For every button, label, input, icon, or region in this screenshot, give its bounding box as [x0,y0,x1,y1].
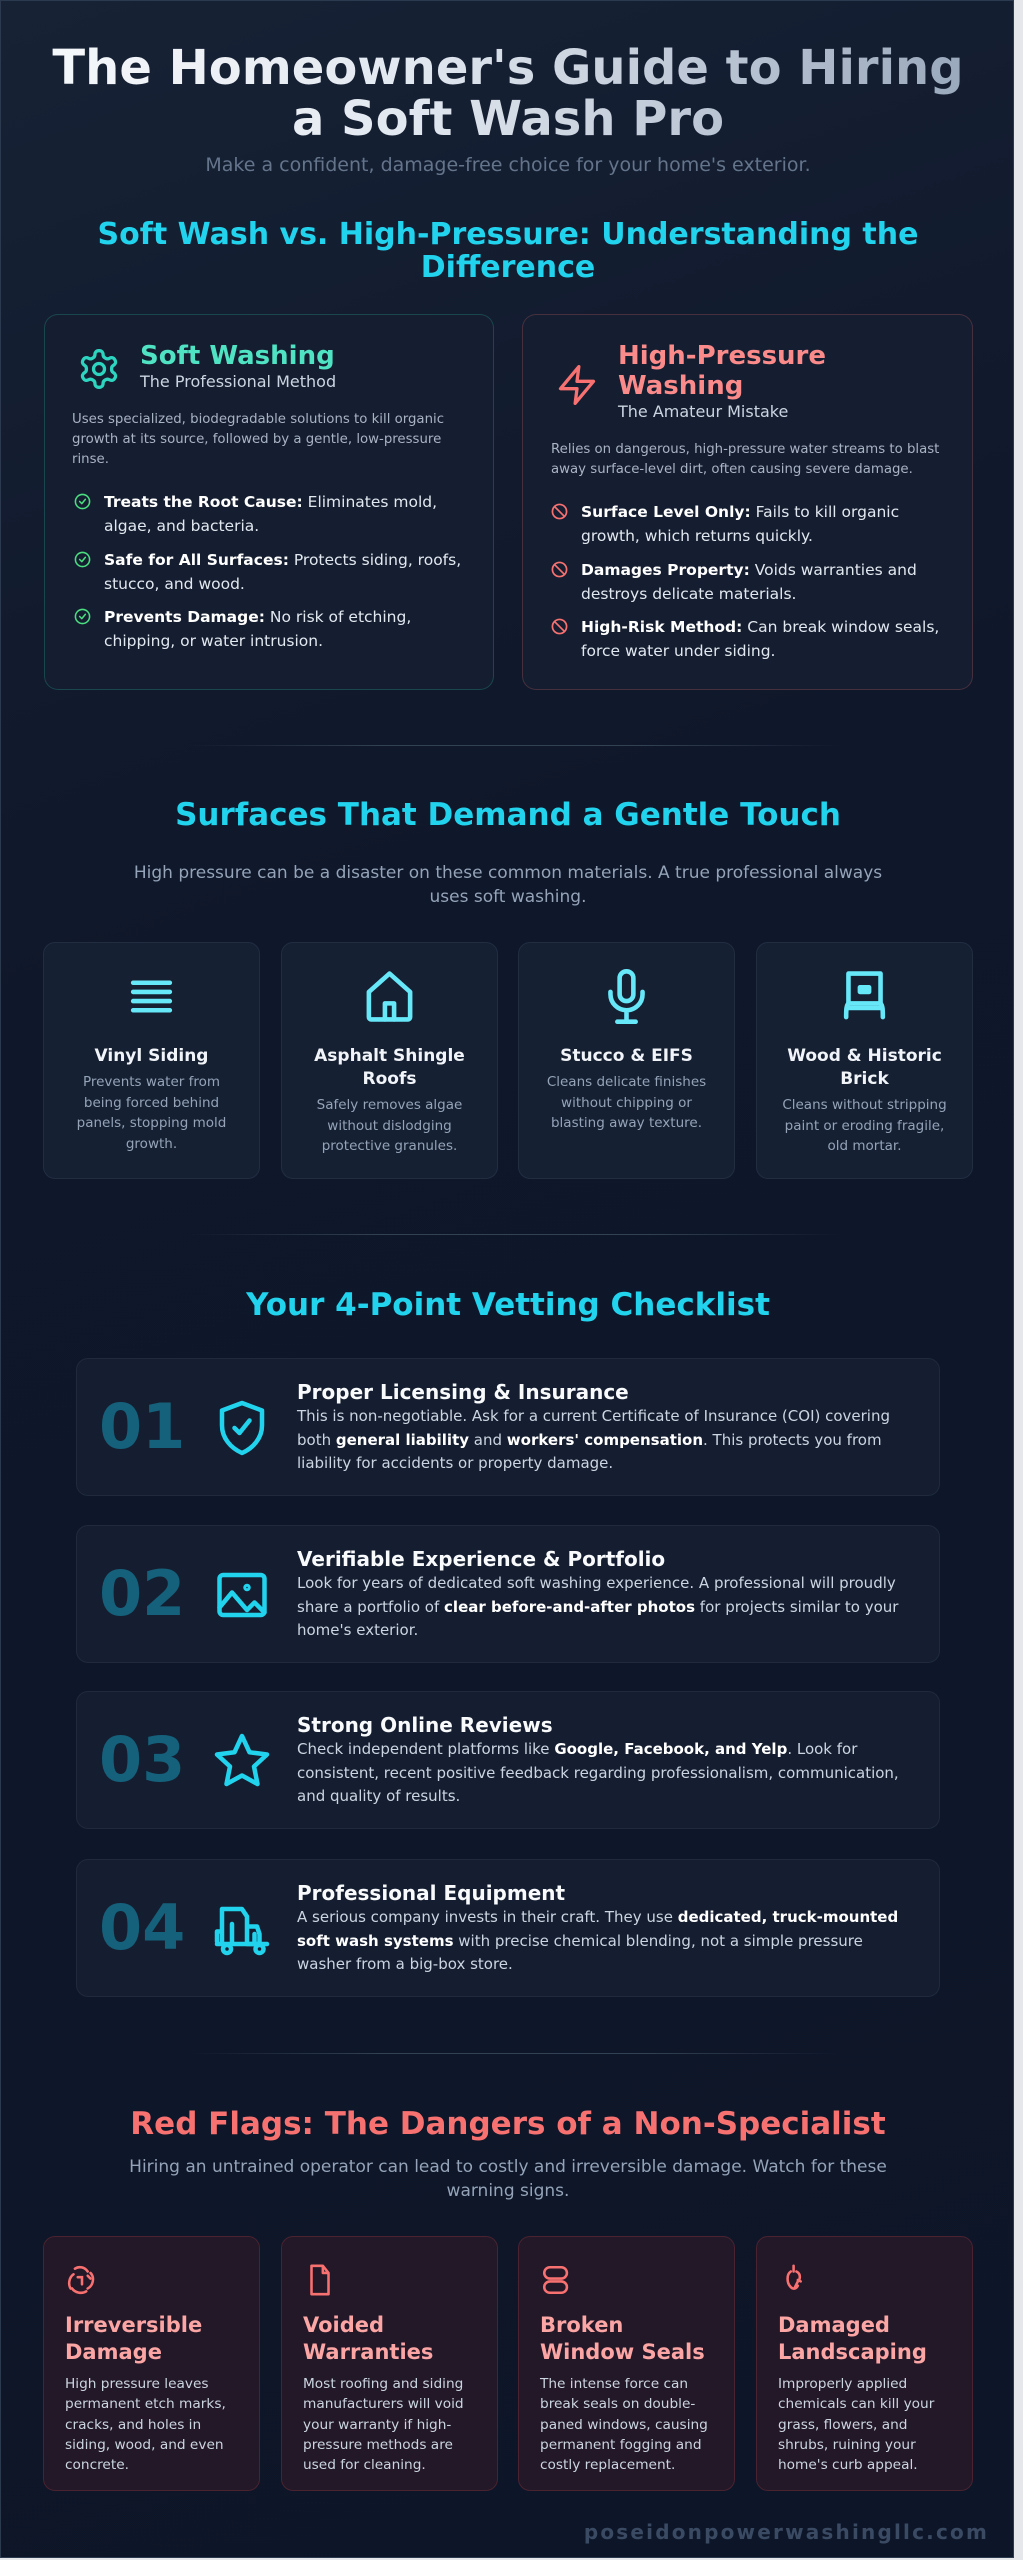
red flags intro: Hiring an untrained operator can lead to costly and irreversible damage. Watch for these warning signs. [129,2157,887,2201]
red flag: damaged landscaping: Damaged [778,2313,890,2337]
checklist item 02: Verifiable Experience & Portfolio [297,1547,665,1571]
icon: house [366,971,412,1022]
card: vinyl siding: Prevents water from being forced behind panels, stopping mold growth. [77,1074,226,1152]
checklist item 01: This is non-negotiable. Ask for a current Certificate of Insurance (COI) covering both general liability and workers' compensation. This protects you from liability for accidents or property damage. [297,1407,890,1472]
benefits list: Treats the Root Cause: Eliminates mold, algae, and bacteria. [104,493,437,535]
panel heading [618,341,826,421]
drawbacks list: Surface Level Only: Fails to kill organic growth, which returns quickly. [581,503,899,545]
red flag: irreversible damage: High pressure leaves permanent etch marks, cracks, and holes in siding, wood, and even concrete. [65,2376,226,2473]
heading: checklist: Your 4-Point Vetting Checklist [246,1287,770,1323]
card: asphalt roofs: Asphalt Shingle Roofs [314,1046,465,1089]
title: a Soft Wash Pro [292,91,724,147]
checklist item 02 [76,1525,940,1663]
icon: microphone [608,969,645,1024]
description: Uses specialized, biodegradable solutions to kill organic growth at its source, followed by a gentle, low-pressure rinse. [72,412,444,467]
icon: gear [80,349,118,389]
icon: wood box [844,971,886,1020]
checklist item 03: Check independent platforms like Google, Facebook, and Yelp. Look for consistent, recent positive feedback regarding professionalism, communication, and quality of results. [297,1740,899,1805]
checklist item 01 [76,1358,940,1496]
panel heading: The Amateur Mistake [618,402,788,421]
red flag: voided warranties: Warranties [303,2340,433,2364]
red flag: broken window seals: The intense force can break seals on double-paned windows, causing permanent fogging and costly replacement. [540,2376,708,2473]
checklist item 03: 03 [99,1723,185,1796]
card: asphalt roofs: Safely removes algae without dislodging protective granules. [317,1097,462,1154]
red flag: damaged landscaping [756,2236,973,2491]
panel heading: The Professional Method [140,372,336,391]
title [1,43,1015,145]
panel heading: High-Pressure [618,341,826,371]
card: wood & brick [756,942,973,1179]
red flag: damaged landscaping: Improperly applied chemicals can kill your grass, flowers, and shrubs, ruining your home's curb appeal. [778,2376,934,2473]
icon: truck [214,1906,270,1956]
red flag: broken window seals: Window Seals [540,2340,705,2364]
red flag: voided warranties [281,2236,498,2491]
panel: soft washing [44,314,494,690]
checklist item 01: Proper Licensing & Insurance [297,1380,629,1404]
panel: high-pressure washing [522,314,973,690]
benefits list [74,493,461,650]
panel heading: Soft Washing [140,341,335,371]
footer: website: poseidonpowerwashingllc.com [584,2520,989,2544]
red flag: voided warranties: Voided [303,2313,384,2337]
title: The Homeowner's Guide to Hiring [52,40,964,96]
red flag: damaged landscaping: Landscaping [778,2340,927,2364]
icon: damaged plant [786,2264,802,2290]
icon: image [217,1572,267,1618]
icon: star [214,1734,270,1786]
checklist item 04: 04 [99,1891,185,1964]
red flag: irreversible damage: Damage [65,2340,162,2364]
panel heading [140,341,336,391]
subtitle: Make a confident, damage-free choice for your home's exterior. [205,154,811,176]
card: stucco: Stucco & EIFS [560,1046,693,1066]
checklist item 04: Professional Equipment [297,1881,565,1905]
icon: window panes [543,2266,568,2294]
card: asphalt roofs [281,942,498,1179]
icon: siding lines [130,980,172,1012]
card: vinyl siding [43,942,260,1179]
icon: damage swirl [68,2266,94,2294]
checklist item 04: A serious company invests in their craft. They use dedicated, truck-mounted soft wash systems with precise chemical blending, not a simple pressure [297,1908,898,1950]
checklist item 02: 02 [99,1557,185,1630]
red flag: irreversible damage: Irreversible [65,2313,202,2337]
checklist item 01: 01 [99,1390,185,1463]
red flag: irreversible damage [43,2236,260,2491]
benefits list: Safe for All Surfaces: Protects siding, roofs, stucco, and wood. [104,550,461,592]
drawbacks list [552,503,939,660]
icon: lightning bolt [558,365,596,405]
panel heading: Washing [618,371,743,401]
card: vinyl siding: Vinyl Siding [95,1046,208,1066]
checklist item 04 [76,1859,940,1997]
card: wood & brick: Cleans without stripping paint or eroding fragile, old mortar. [782,1097,947,1154]
card: wood & brick: Wood & Historic Brick [787,1046,942,1089]
heading: red flags: Red Flags: The Dangers of a Non-Specialist [130,2106,886,2142]
drawbacks list: High-Risk Method: Can break window seals, force water under siding. [581,618,939,660]
benefits list: Prevents Damage: No risk of etching, chipping, or water intrusion. [104,608,411,650]
checklist item 03: Strong Online Reviews [297,1713,553,1737]
card: stucco [518,942,735,1179]
icon: file [310,2264,330,2296]
checklist item 04: washer from a big-box store. [297,1955,513,1973]
drawbacks list: Damages Property: Voids warranties and destroys delicate materials. [581,560,917,602]
red flag: broken window seals: Broken [540,2313,623,2337]
card: stucco: Cleans delicate finishes without chipping or blasting away texture. [547,1074,706,1131]
heading: surfaces: Surfaces That Demand a Gentle Touch [175,797,841,833]
surfaces intro: High pressure can be a disaster on these common materials. A true professional always uses soft washing. [134,863,882,907]
description: Relies on dangerous, high-pressure water streams to blast away surface-level dirt, often causing severe damage. [551,442,939,477]
heading: soft wash vs high pressure: Soft Wash vs. High-Pressure: Understanding the Difference [98,217,918,285]
checklist item 02: Look for years of dedicated soft washing experience. A professional will proudly share a portfolio of clear before-and-after photos for projects similar to your home's exterior. [297,1574,898,1639]
icon: shield check [220,1400,264,1456]
checklist item 03 [76,1691,940,1829]
red flag: voided warranties: Most roofing and siding manufacturers will void your warranty if high-pressure methods are used for cleaning. [303,2376,464,2473]
red flag: broken window seals [518,2236,735,2491]
